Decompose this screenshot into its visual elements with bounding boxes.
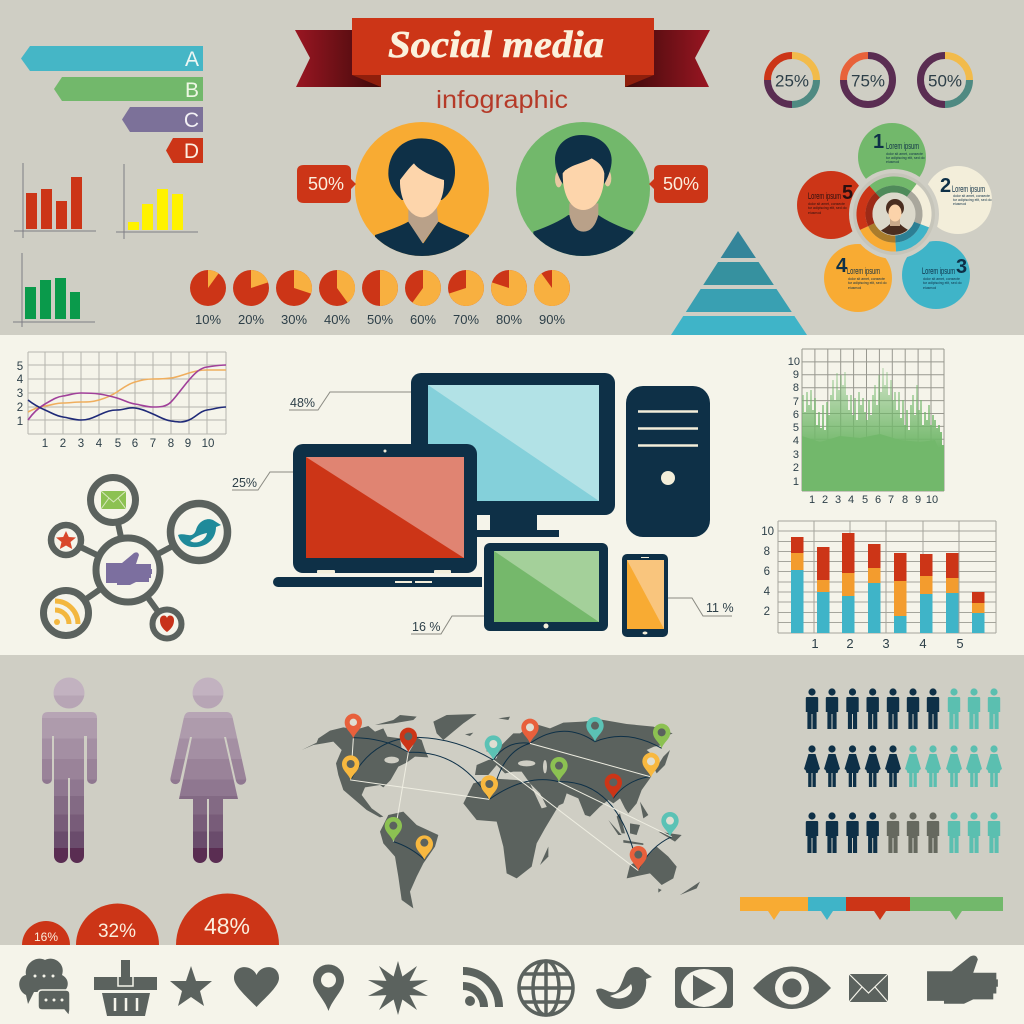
- line chart: 5: [17, 361, 23, 373]
- petal 3 text: tur adipiscing elit, sed do: [923, 281, 962, 285]
- donut 25%: 25%: [775, 72, 809, 90]
- callout 11%: [668, 598, 734, 616]
- seas: [384, 757, 547, 782]
- half circle 16%: [22, 921, 70, 945]
- petal 1 text: eiusmod: [886, 160, 899, 164]
- ribbon list A B C D: C: [184, 109, 199, 132]
- continents: [302, 714, 700, 908]
- people pictogram row 1: [806, 688, 1000, 729]
- petal 5 text: [808, 182, 853, 215]
- stacked bar chart: 6: [764, 566, 770, 578]
- ribbon list A B C D: B: [185, 79, 199, 102]
- half circle 48%: 48%: [204, 913, 250, 939]
- stacked bar chart: 8: [764, 546, 770, 558]
- line chart: 8: [168, 438, 174, 450]
- line chart: 10: [202, 438, 214, 450]
- devices: tablet: [482, 541, 610, 633]
- icon: eye: [753, 966, 831, 1009]
- icon: rss: [463, 971, 499, 1007]
- donut 25%: [768, 56, 816, 104]
- petal 2 text: [940, 175, 992, 206]
- green area chart: 2: [822, 494, 828, 506]
- pie 20%: [233, 270, 269, 327]
- icon: envelope: [849, 974, 888, 1002]
- half circle 32%: 32%: [98, 921, 136, 942]
- callout 48%: 48%: [290, 396, 315, 410]
- green area chart: 8: [793, 382, 799, 394]
- people pictogram row 3: [806, 812, 1000, 853]
- callout 25%: 25%: [232, 476, 257, 490]
- green area chart: 9: [793, 369, 799, 381]
- line chart: 4: [96, 438, 103, 450]
- line chart: 4: [17, 374, 24, 386]
- female figure: [170, 678, 246, 863]
- stacked bar chart: 2: [764, 606, 770, 618]
- petal 1 text: dolor sit amet, consecte: [886, 152, 923, 156]
- petal 3 text: dolor sit amet, consecte: [923, 277, 960, 281]
- avatar: man with 50% callout: 50%: [663, 174, 699, 194]
- green area chart: 4: [848, 494, 854, 506]
- callout 11%: 11 %: [706, 601, 734, 615]
- green area chart: 6: [875, 494, 881, 506]
- people pictogram row 2: [804, 745, 1002, 787]
- green area chart: 10: [926, 494, 938, 506]
- callout 25%: [232, 472, 293, 490]
- pie 60%: 60%: [410, 312, 436, 327]
- pie 70%: 70%: [453, 312, 479, 327]
- routes: [351, 731, 672, 870]
- green area chart: 5: [793, 422, 799, 434]
- petal 3 text: 3: [956, 256, 967, 278]
- donut 75%: [844, 56, 892, 104]
- bar chart: red: [14, 163, 96, 238]
- stacked bar chart: 5: [956, 636, 964, 651]
- pie 60%: [405, 270, 441, 327]
- stacked bar chart: 1: [811, 636, 819, 651]
- center avatar: [881, 199, 908, 235]
- green area chart: 8: [902, 494, 908, 506]
- line chart: 3: [17, 388, 23, 400]
- pie 20%: 20%: [238, 312, 264, 327]
- title ribbon: Social media: [388, 24, 604, 66]
- line chart: 1: [42, 438, 48, 450]
- avatar: woman with 50% callout: 50%: [308, 174, 344, 194]
- stacked bar chart: 4: [764, 586, 771, 598]
- stacked bar chart: 2: [846, 636, 854, 651]
- stacked bar chart: [761, 521, 996, 651]
- petal 2 text: dolor sit amet, consecte: [953, 194, 990, 198]
- icon: star: [170, 966, 212, 1006]
- petal 5 text: 5: [842, 182, 853, 204]
- petal 5 text: eiusmod: [808, 211, 821, 215]
- icon: globe: [519, 961, 573, 1015]
- petal 5 text: Lorem ipsum: [808, 191, 841, 201]
- line chart: 3: [78, 438, 84, 450]
- subtitle: infographic: [436, 86, 568, 114]
- icon: thumbs up: [106, 552, 152, 585]
- devices: tower: [626, 386, 710, 537]
- pie 50%: 50%: [367, 312, 393, 327]
- line chart: 9: [185, 438, 191, 450]
- pie 40%: [319, 270, 355, 327]
- icon: burst: [368, 961, 428, 1015]
- callout 48%: [289, 392, 411, 410]
- line chart: 6: [132, 438, 138, 450]
- green area chart: 7: [793, 396, 799, 408]
- line chart: 1: [17, 416, 23, 428]
- icon: rss: [54, 601, 78, 625]
- petal 2 text: 2: [940, 175, 951, 197]
- ribbon list A B C D: [21, 46, 203, 163]
- icon: large thumbs up: [927, 955, 998, 1004]
- green area chart: 3: [793, 449, 799, 461]
- ribbon list A B C D: D: [184, 140, 199, 163]
- petal 2 text: eiusmod: [953, 202, 966, 206]
- world map with pins and routes: [302, 714, 700, 908]
- icon: bird: [178, 519, 221, 547]
- stacked bar chart: 4: [919, 636, 927, 651]
- pie 50%: [362, 270, 398, 327]
- callout 16%: 16 %: [412, 620, 440, 634]
- icon: heart: [234, 967, 279, 1007]
- pie 90%: [534, 270, 570, 327]
- petal 1 text: [873, 131, 925, 164]
- half circle 32%: [76, 904, 159, 945]
- devices: monitor: [411, 373, 615, 537]
- map pins: [342, 714, 679, 871]
- green area chart: 2: [793, 462, 799, 474]
- bar chart: yellow: [116, 164, 198, 239]
- petal 1 text: tur adipiscing elit, sed do: [886, 156, 925, 160]
- petal 4 text: dolor sit amet, consecte: [848, 277, 885, 281]
- half circle 48%: [176, 894, 279, 945]
- icon: heart: [160, 616, 174, 632]
- bar chart: green: [13, 253, 95, 327]
- petal 2 text: tur adipiscing elit, sed do: [953, 198, 992, 202]
- pie 30%: [276, 270, 312, 327]
- ribbon list A B C D: A: [185, 48, 199, 71]
- pie 80%: [491, 270, 527, 327]
- green area chart: 1: [809, 494, 815, 506]
- petal 5 text: dolor sit amet, consecte: [808, 202, 845, 206]
- green area chart: 4: [793, 435, 799, 447]
- icon: chat bubbles: [19, 959, 70, 1016]
- petal 1 text: 1: [873, 131, 884, 153]
- donut 50%: 50%: [928, 72, 962, 90]
- green area chart: 10: [788, 356, 800, 368]
- half circle 16%: 16%: [34, 930, 58, 944]
- avatar: man with 50% callout: [516, 122, 708, 263]
- flower diagram: five numbered petals around avatar: [797, 123, 992, 312]
- green area chart: 1: [793, 476, 799, 488]
- pie 70%: [448, 270, 484, 327]
- pie 90%: 90%: [539, 312, 565, 327]
- green area chart: 6: [793, 409, 799, 421]
- pyramid: [671, 231, 807, 335]
- petal 3 text: [922, 256, 967, 290]
- pie 10%: 10%: [195, 312, 221, 327]
- petal 4 text: 4: [836, 255, 848, 277]
- stacked bar chart: 10: [761, 526, 774, 538]
- icon: play button: [675, 967, 733, 1008]
- petal 4 text: Lorem ipsum: [847, 266, 880, 276]
- petal 1 text: Lorem ipsum: [886, 141, 919, 151]
- petal 4 text: [836, 255, 887, 290]
- donut 75%: 75%: [851, 72, 885, 90]
- pie 40%: 40%: [324, 312, 350, 327]
- line chart: 5: [115, 438, 121, 450]
- callout 16%: [411, 616, 484, 634]
- green area chart: [788, 349, 944, 506]
- bottom icon strip: [19, 955, 998, 1016]
- pie 10%: [190, 270, 226, 327]
- male figure: [42, 678, 97, 863]
- segmented color bar with pointers: [740, 897, 1003, 920]
- line chart: [17, 352, 226, 450]
- stacked bar chart: 3: [882, 636, 890, 651]
- petal 2 text: Lorem ipsum: [952, 184, 985, 194]
- icon: star: [56, 531, 76, 549]
- pie charts row: [190, 270, 570, 327]
- green area chart: 9: [915, 494, 921, 506]
- petal 4 text: tur adipiscing elit, sed do: [848, 281, 887, 285]
- line chart: 7: [150, 438, 156, 450]
- social network diagram: [44, 478, 228, 638]
- icon: bird: [596, 967, 652, 1009]
- title ribbon: [295, 18, 710, 87]
- green area chart: 7: [888, 494, 894, 506]
- avatar: woman with 50% callout: [297, 122, 489, 263]
- petal 5 text: tur adipiscing elit, sed do: [808, 206, 847, 210]
- icon: location pin: [313, 964, 344, 1011]
- petal 3 text: eiusmod: [923, 286, 936, 290]
- devices: laptop: [273, 444, 490, 587]
- line chart: 2: [17, 402, 23, 414]
- green area chart: 5: [862, 494, 868, 506]
- donut 50%: [920, 56, 970, 104]
- icon: envelope: [101, 491, 126, 509]
- icon: basket: [94, 960, 157, 1016]
- petal 3 text: Lorem ipsum: [922, 266, 955, 276]
- pie 30%: 30%: [281, 312, 307, 327]
- line chart: 2: [60, 438, 66, 450]
- devices: phone: [622, 554, 668, 637]
- green area chart: 3: [835, 494, 841, 506]
- pie 80%: 80%: [496, 312, 522, 327]
- petal 4 text: eiusmod: [848, 286, 861, 290]
